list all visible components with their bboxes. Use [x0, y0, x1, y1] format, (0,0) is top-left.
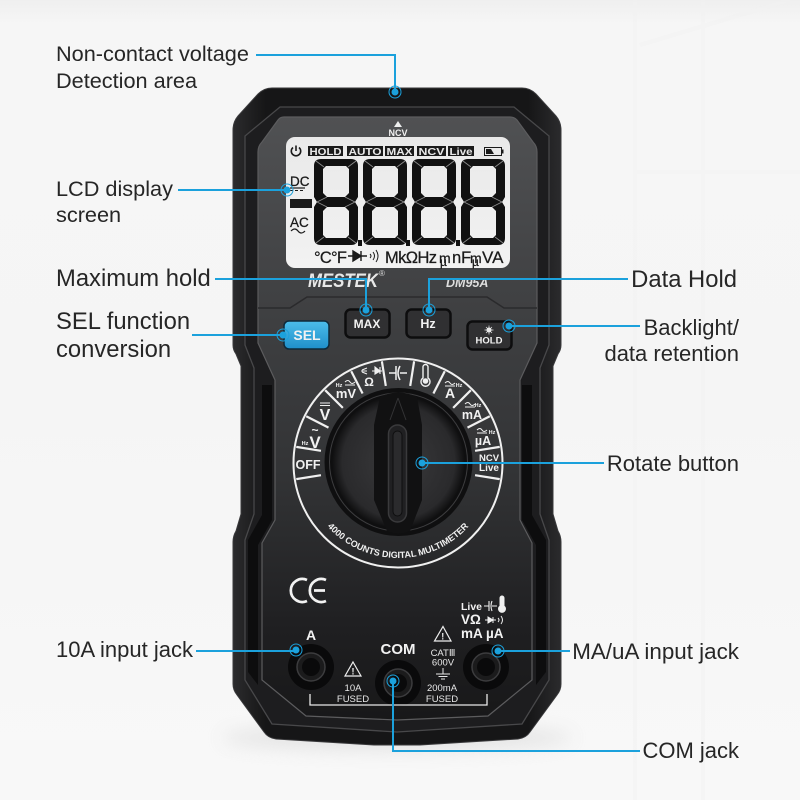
unit symbols: VA	[482, 248, 504, 267]
dial function labels: µA	[475, 434, 491, 448]
callout: backlight data retention: data retention	[604, 341, 739, 366]
jack bracket	[310, 694, 487, 705]
COM jack: COM	[380, 641, 416, 658]
front face panel	[258, 117, 537, 720]
panel notch line	[258, 297, 537, 308]
callout: SEL function conversion: conversion	[56, 336, 171, 363]
brand logo: MESTEK	[308, 270, 380, 292]
callout: 10A input jack: 10A input jack	[56, 637, 194, 662]
unit symbols: °C°F	[314, 249, 347, 267]
right jack function labels: VΩ	[461, 612, 481, 627]
callout: COM jack: COM jack	[642, 738, 740, 763]
dial function labels: Hz	[302, 441, 309, 447]
dial function labels: A	[445, 385, 455, 401]
dial function labels: NCV	[479, 453, 500, 464]
unit symbols: µ	[440, 255, 447, 269]
dial ticks	[296, 361, 500, 479]
dial ring	[294, 358, 502, 568]
COM jack	[375, 641, 421, 706]
left jack A: A	[306, 627, 316, 643]
dial function labels: mA	[462, 408, 482, 422]
dial function labels: Hz	[489, 430, 496, 436]
unit symbols: µ	[472, 255, 479, 269]
status indicators: NCV	[418, 146, 444, 158]
CAT III warning	[426, 626, 458, 705]
dial function labels: ~	[311, 423, 319, 437]
power icon	[291, 146, 301, 156]
callout: SEL function conversion: SEL function	[56, 308, 190, 335]
status indicators: HOLD	[310, 146, 342, 158]
callout: LCD display screen: screen	[56, 202, 121, 227]
right jack function labels: Live	[461, 601, 482, 613]
DC AC indicators	[290, 174, 312, 233]
10A fuse warning: FUSED	[337, 694, 369, 705]
callout: COM jack	[387, 675, 740, 763]
CE mark	[291, 579, 326, 602]
dial function labels: OFF	[296, 458, 321, 472]
dial function labels: Hz	[456, 383, 463, 389]
knob slot	[388, 425, 406, 522]
10A fuse warning: !	[352, 666, 354, 676]
callout: rotate button	[416, 451, 739, 476]
dial caption: 4000 COUNTS DIGITAL MULTIMETER	[328, 523, 469, 558]
SEL button: SEL	[293, 327, 321, 343]
callout: maximum hold: Maximum hold	[56, 265, 211, 292]
callout: data hold	[423, 266, 737, 316]
knob	[324, 388, 472, 536]
CAT III warning: !	[441, 632, 444, 642]
DC AC indicators: DC	[290, 174, 310, 189]
Hz button	[406, 310, 450, 338]
unit symbols: m	[470, 250, 482, 266]
callout: maximum hold	[56, 265, 372, 316]
Hz button: Hz	[420, 317, 436, 331]
HOLD backlight button: HOLD	[476, 336, 503, 346]
unit symbols: m	[439, 250, 451, 266]
callout: non-contact voltage: Detection area	[56, 68, 198, 93]
dial function labels: Ω	[364, 375, 374, 389]
unit symbols: MkΩHz	[385, 249, 437, 267]
knob handle	[374, 392, 422, 534]
MAX button: MAX	[354, 317, 380, 331]
MAX button	[346, 310, 390, 338]
callout: SEL function conversion	[56, 308, 289, 363]
dial function labels: V	[320, 407, 331, 424]
CAT III warning: FUSED	[426, 694, 458, 705]
multimeter	[232, 88, 562, 746]
CAT III warning: 200mA	[427, 683, 458, 694]
callout: non-contact voltage: Non-contact voltage	[56, 41, 249, 66]
grip shading	[248, 385, 546, 685]
callout: rotate button: Rotate button	[607, 451, 739, 476]
status indicators: Live	[450, 146, 473, 158]
raised bezel ridge	[245, 107, 549, 732]
callout: LCD display screen: LCD display	[56, 176, 173, 201]
NCV sensor mark: NCV	[388, 128, 408, 138]
CAT III warning: CATⅢ	[431, 648, 455, 659]
callout: non-contact voltage	[56, 41, 401, 98]
meter body shell	[233, 88, 561, 745]
callout: backlight data retention: Backlight/	[644, 315, 740, 340]
callout: LCD display screen	[56, 176, 293, 227]
CAT III warning: 600V	[432, 658, 455, 668]
unit symbols	[314, 248, 504, 269]
seven segment digits	[314, 159, 505, 246]
right jack	[463, 644, 509, 690]
brand logo: ®	[379, 269, 385, 278]
unit symbols: nF	[452, 249, 471, 267]
dial function labels: Hz	[475, 403, 482, 409]
dial function labels: Live	[479, 463, 499, 474]
LCD display	[286, 137, 510, 269]
10A fuse warning	[337, 662, 369, 705]
HOLD backlight button	[468, 322, 512, 350]
right jack function labels	[461, 596, 506, 641]
callout: MA uA input jack	[492, 639, 740, 664]
10A fuse warning: 10A	[345, 683, 362, 694]
dial function labels	[296, 364, 500, 474]
dial function labels: V	[309, 433, 321, 452]
battery icon	[484, 148, 504, 156]
callout: data hold: Data Hold	[631, 266, 737, 293]
status indicators: AUTO	[348, 146, 382, 158]
status indicators	[308, 146, 474, 158]
callout: MA uA input jack: MA/uA input jack	[572, 639, 740, 664]
SEL button	[284, 321, 329, 349]
dial function labels: mV	[336, 386, 356, 401]
status indicators: MAX	[386, 146, 412, 158]
dial function labels: Hz	[336, 383, 343, 389]
DC AC indicators: AC	[290, 215, 309, 230]
NCV sensor mark	[388, 121, 408, 138]
callout: 10A input jack	[56, 637, 302, 662]
rotary dial	[292, 358, 504, 568]
callout: backlight data retention	[503, 315, 740, 366]
left jack A	[288, 627, 334, 690]
model name: DM95A	[446, 276, 488, 290]
right jack function labels: mA µA	[461, 626, 504, 641]
